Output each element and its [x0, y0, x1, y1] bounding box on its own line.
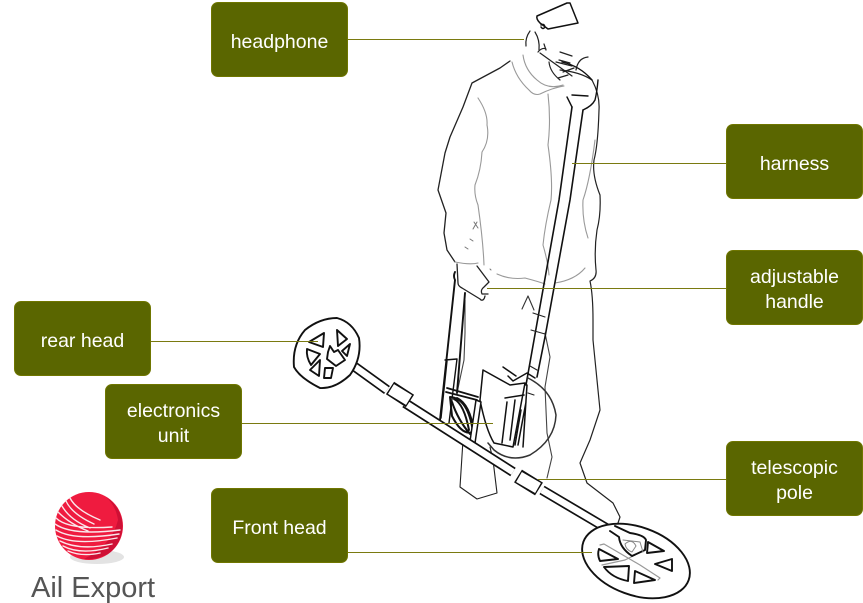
label: telescopic pole	[726, 441, 863, 516]
hand	[457, 264, 489, 300]
leader lines	[151, 40, 726, 552]
jacket seams	[455, 55, 595, 284]
trouser lines	[457, 300, 552, 478]
label: telescopic pole: telescopic	[751, 457, 838, 479]
label: rear head: rear head	[41, 330, 124, 352]
label: headphone	[211, 2, 348, 77]
rear head	[294, 318, 360, 388]
operator figure	[438, 3, 620, 523]
label: harness	[726, 124, 863, 199]
lower leg	[460, 440, 497, 499]
adjustable handle rod	[440, 272, 465, 423]
label: front head: Front head	[232, 516, 327, 538]
face details	[526, 31, 588, 80]
creases	[465, 222, 491, 270]
coiled cable	[488, 378, 556, 458]
label: adjustable handle: handle	[765, 291, 824, 313]
label: adjustable handle: adjustable	[750, 266, 839, 288]
logo sphere	[55, 492, 124, 564]
jacket outline	[438, 61, 510, 262]
front head	[572, 510, 700, 603]
label: headphone: headphone	[231, 30, 328, 52]
electronics unit	[446, 367, 535, 450]
harness strap and upper pole	[526, 62, 598, 395]
label: rear head	[14, 301, 151, 376]
inner leg mark	[522, 296, 534, 310]
label: electronics unit	[105, 384, 242, 459]
label: harness: harness	[760, 152, 829, 174]
label: front head	[211, 488, 348, 563]
label: electronics unit: unit	[158, 425, 189, 447]
telescopic pole	[344, 359, 613, 532]
label: adjustable handle	[726, 250, 863, 325]
label: telescopic pole: pole	[776, 482, 813, 504]
label: electronics unit: electronics	[127, 400, 220, 422]
headphone cap	[537, 3, 578, 29]
back and right leg outline	[560, 70, 620, 523]
